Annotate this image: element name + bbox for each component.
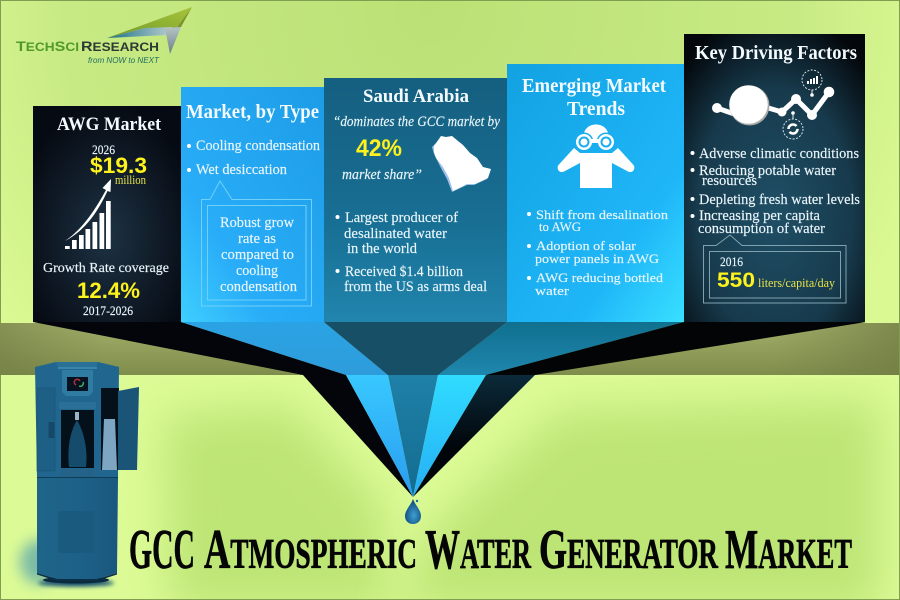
bullet list: trends	[527, 207, 669, 298]
callout: 2016 per capita consumption: 2016	[720, 255, 743, 269]
callout: robust growth: compared to	[221, 247, 294, 263]
bullet list: driving factors: Depleting fresh water levels	[699, 192, 860, 208]
heading: Key Driving Factors: Key Driving Factors	[695, 42, 857, 64]
callout: 2016 per capita consumption: 550	[717, 269, 755, 292]
callout: robust growth: rate as	[238, 231, 276, 247]
icon: water drop	[405, 499, 421, 524]
bullet list: trends: water	[535, 283, 570, 298]
bullet list: driving factors	[690, 146, 860, 237]
bullet list: driving factors: consumption of water	[698, 221, 825, 237]
icon: person with binoculars	[558, 124, 634, 188]
bullet list: Saudi facts: in the world	[347, 241, 418, 257]
quote: market share: 42%	[356, 135, 402, 162]
heading: Emerging Market Trends: Trends	[567, 98, 625, 120]
logo: TechSci Research: TECH SCI	[16, 39, 79, 54]
stat: growth rate	[43, 261, 169, 318]
bullet list: trends: to AWG	[539, 219, 581, 234]
bullet list: types	[187, 138, 320, 178]
quote: market share: market share”	[342, 167, 422, 183]
bullet list: types: Wet desiccation	[196, 162, 287, 178]
bullet list: driving factors: Increasing per capita	[699, 208, 821, 224]
callout: robust growth: condensation	[220, 279, 298, 295]
bullet list: driving factors: Adverse climatic conditions	[699, 146, 859, 162]
olive band	[0, 323, 899, 375]
bullet list: Saudi facts: Received $1.4 billion	[345, 264, 464, 280]
water generator machine	[20, 362, 139, 586]
bullet list: trends: power panels in AWG	[535, 251, 659, 266]
title: WATER	[425, 519, 531, 581]
icon: Saudi Arabia map	[432, 136, 491, 192]
stat: growth rate: Growth Rate coverage	[43, 261, 169, 276]
callout: 2016 per capita consumption	[704, 235, 846, 303]
panel: Market, by Type	[181, 87, 324, 322]
bullet list: trends: Adoption of solar	[536, 238, 637, 253]
chart: rising bars with arrow	[65, 179, 111, 249]
heading: Emerging Market Trends: Emerging Market	[522, 75, 666, 97]
bullet list: Saudi facts: from the US as arms deal	[344, 279, 487, 295]
heading: Market, by Type: Market, by Type	[186, 101, 319, 123]
callout: robust growth	[202, 181, 312, 306]
heading: AWG Market: AWG Market	[57, 114, 162, 135]
bullet list: Saudi facts	[336, 210, 487, 295]
funnel connecting panels to water drop	[33, 322, 866, 497]
heading: Saudi Arabia: Saudi Arabia	[363, 86, 469, 107]
title: GCC	[129, 519, 195, 581]
bullet list: types: Cooling condensation	[196, 138, 320, 154]
stat: growth rate: 2017-2026	[83, 304, 133, 318]
title	[129, 519, 852, 581]
heading: Emerging Market Trends	[522, 75, 666, 120]
callout: robust growth: cooling	[236, 263, 278, 279]
title: ATMOSPHERIC	[204, 519, 417, 581]
bullet list: driving factors: Reducing potable water	[699, 163, 836, 179]
logo: TechSci Research	[16, 7, 192, 65]
bullet list: driving factors: resources	[702, 173, 757, 189]
callout: robust growth: Robust grow	[220, 215, 295, 231]
quote: market share	[333, 114, 500, 183]
stat: growth rate: 12.4%	[77, 278, 140, 303]
title: GENERATOR	[539, 519, 718, 581]
logo: TechSci Research: from NOW to NEXT	[88, 55, 160, 65]
stat: 2026 market value	[90, 142, 147, 187]
panel: Saudi Arabia	[324, 78, 507, 322]
callout: 2016 per capita consumption: liters/capita/day	[758, 275, 835, 290]
panel: Key Driving Factors	[684, 34, 865, 322]
stat: 2026 market value: 2026	[92, 142, 115, 157]
bullet list: Saudi facts: desalinated water	[344, 226, 447, 242]
stat: 2026 market value: $19.3	[90, 153, 147, 178]
bullet list: trends: AWG reducing bottled	[536, 270, 664, 285]
logo: TechSci Research: RESEARCH	[81, 39, 159, 54]
panel: Emerging Market Trends	[507, 64, 684, 322]
quote: market share: “dominates the GCC market by	[333, 114, 500, 130]
bullet list: trends: Shift from desalination	[536, 207, 669, 222]
panel: AWG Market	[33, 106, 181, 322]
stat: 2026 market value: million	[115, 172, 146, 187]
bullet list: Saudi facts: Largest producer of	[345, 210, 458, 226]
icon: sphere and trend line	[712, 70, 834, 139]
